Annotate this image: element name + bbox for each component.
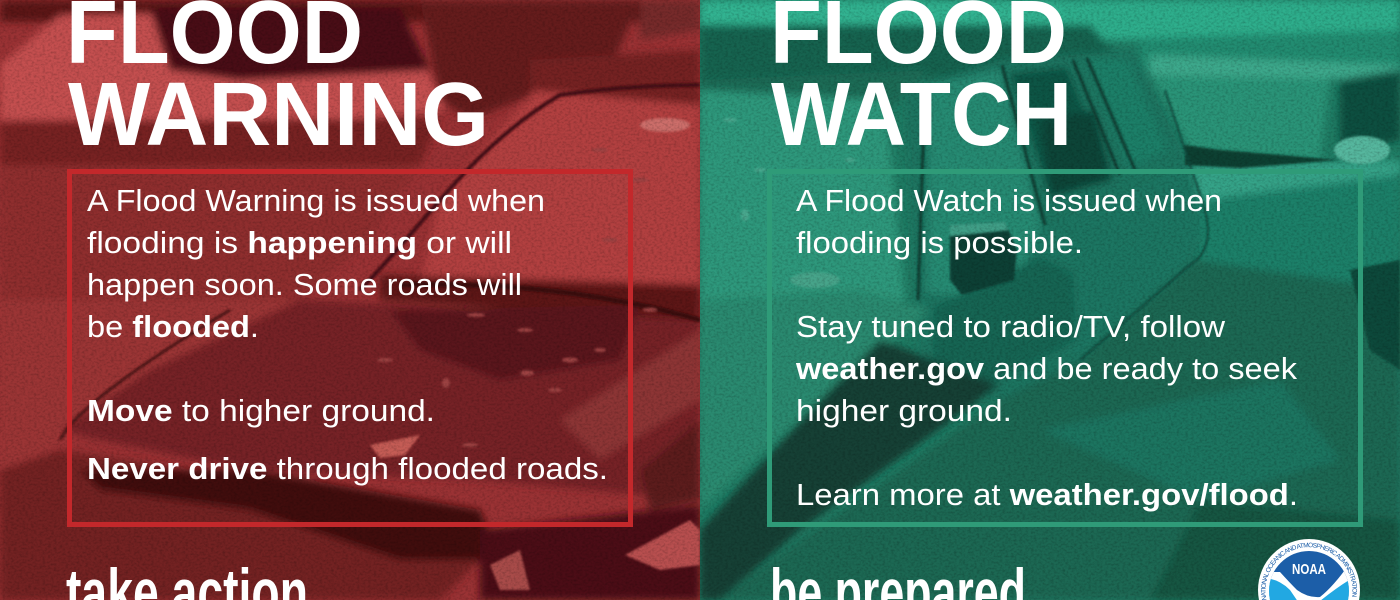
title: flood warning: WARNING — [68, 65, 489, 165]
text block: watch definition: flooding is possible. — [796, 225, 1083, 260]
icon: NOAA logo: NOAA — [1292, 561, 1326, 578]
text block: watch advice: Stay tuned to radio/TV, follow — [796, 309, 1226, 344]
text block: warning definition: happen soon. Some roads will — [87, 267, 522, 302]
text block: watch definition — [796, 183, 1222, 260]
text block: warning definition — [87, 183, 545, 344]
text block: watch advice: higher ground. — [796, 393, 1012, 428]
text block: watch advice: weather.gov and be ready to seek — [795, 351, 1298, 386]
text block: watch definition: A Flood Watch is issued when — [796, 183, 1222, 218]
photo: flooded cars in red duotone — [0, 0, 700, 600]
panel: flood warning — [0, 0, 700, 600]
title: flood warning — [66, 0, 489, 165]
panel: flood watch — [700, 0, 1400, 600]
text block: learn more: Learn more at weather.gov/flood . — [796, 477, 1298, 512]
text block: warning definition: A Flood Warning is issued when — [87, 183, 545, 218]
icon: NOAA logo: NATIONAL OCEANIC AND ATMOSPHERIC ADMINISTRATION — [1261, 542, 1357, 600]
text block: warning actions: Move to higher ground. — [87, 393, 435, 428]
text box frame: warning — [70, 172, 630, 524]
text box frame: watch — [770, 172, 1360, 524]
title: flood watch — [770, 0, 1072, 165]
photo: flooded cars in green duotone — [700, 0, 1400, 600]
droplets — [377, 118, 690, 447]
text block: warning actions — [87, 393, 608, 486]
text block: warning definition: flooding is happening or will — [87, 225, 512, 260]
text block: warning definition: be flooded. — [87, 309, 259, 344]
text block: watch advice — [795, 309, 1298, 428]
text block: warning actions: Never drive through flooded roads. — [87, 451, 608, 486]
title: flood watch: WATCH — [771, 65, 1072, 165]
